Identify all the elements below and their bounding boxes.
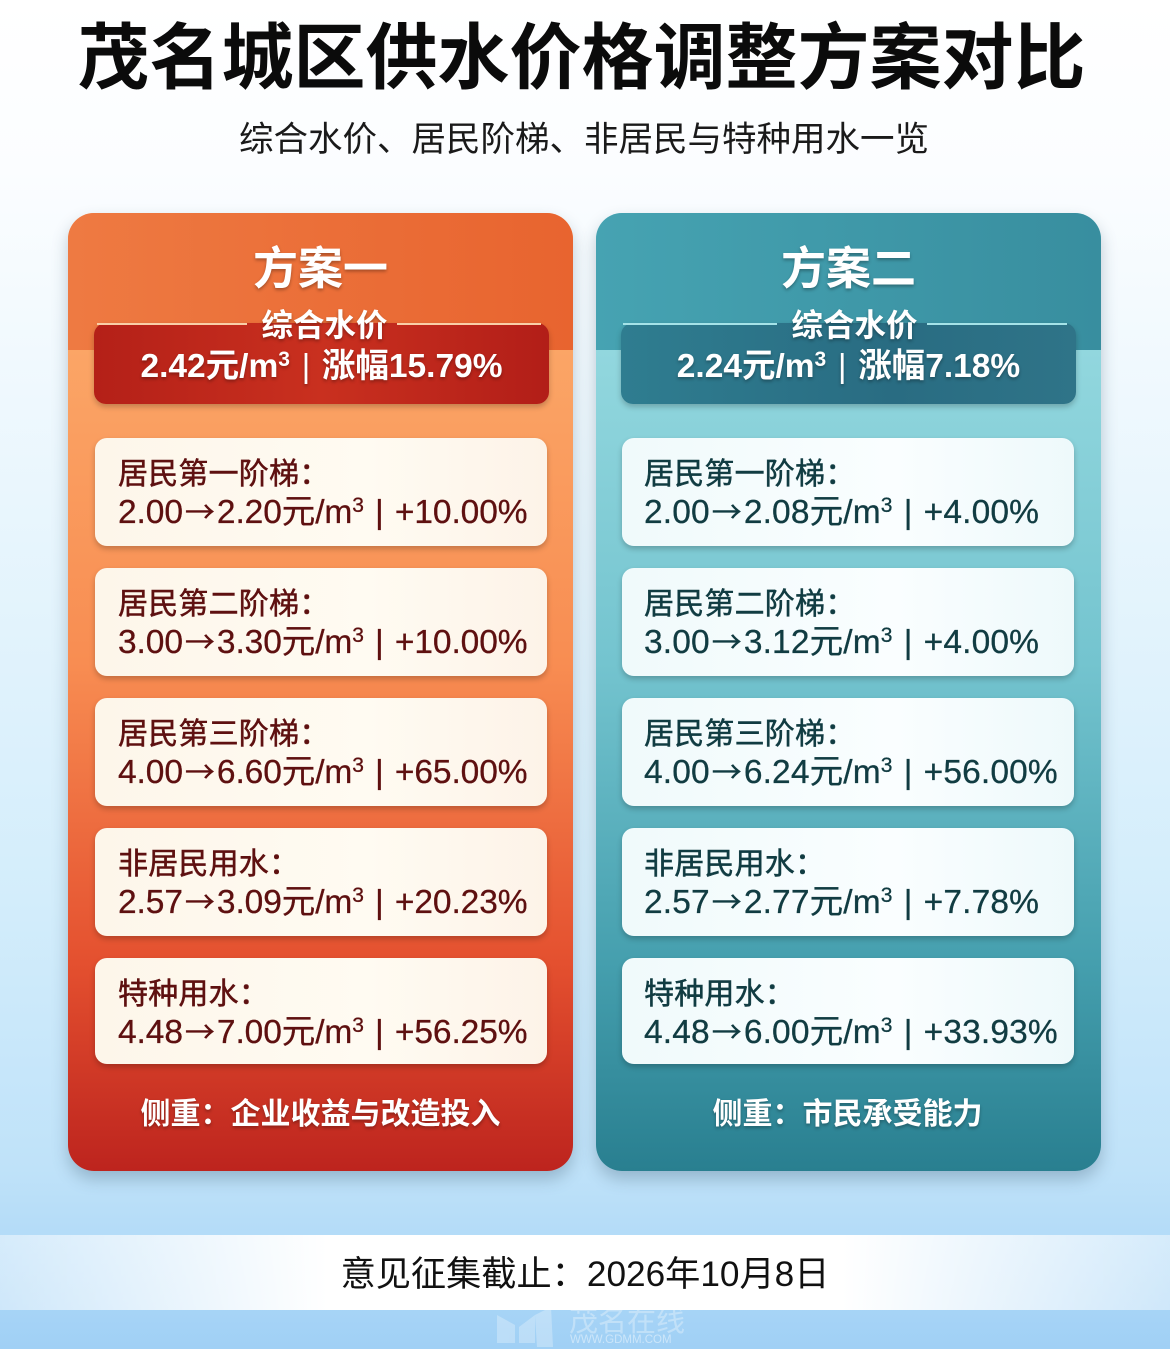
card: tier two: | [904,624,913,661]
card: special water: → [712,1008,742,1052]
card: special water: | [904,1014,913,1051]
panel: plan one [68,213,573,1171]
card: non-resident [622,828,1074,936]
card: tier three: 3 [881,754,893,777]
card: tier three: 居民第三阶梯： [118,709,329,753]
card: tier one [622,438,1074,546]
plan two composite price box [621,323,1076,404]
deadline banner [0,1235,1170,1310]
card: tier three: | [375,754,384,791]
card: tier two [622,568,1074,676]
card: non-resident: 非居民用水： [644,839,825,883]
card: tier three: | [904,754,913,791]
plan two focus: 侧重：市民承受能力 [712,1089,982,1133]
watermark [497,1303,685,1347]
card: special water [95,958,547,1064]
plan one focus: 侧重：企业收益与改造投入 [140,1089,500,1133]
card: tier one: → [712,488,742,532]
card: tier three: 4.00 6.60元/m +65.00% [118,754,527,791]
card: tier one: | [375,494,384,531]
card: tier one: 居民第一阶梯： [644,449,855,493]
card: tier one: | [904,494,913,531]
card: tier two: 居民第二阶梯： [118,579,329,623]
card: non-resident: 2.57 2.77元/m +7.78% [644,884,1039,921]
card: tier two: → [185,618,215,662]
plan one composite price box [94,323,549,404]
card: non-resident [95,828,547,936]
card: non-resident: 2.57 3.09元/m +20.23% [118,884,527,921]
plan two composite label: 综合水价 [791,300,918,346]
card: special water: 3 [352,1014,364,1037]
plan two composite value: 2.24元/m 涨幅7.18% [677,348,1020,385]
subtitle: 综合水价、居民阶梯、非居民与特种用水一览 [239,111,929,161]
card: tier two: 3 [881,624,893,647]
watermark: WWW.GDMM.COM [570,1334,672,1346]
card: tier three [622,698,1074,806]
plan one composite value: 2.42元/m 涨幅15.79% [140,348,503,385]
card: special water: 4.48 7.00元/m +56.25% [118,1014,527,1051]
panel: plan two [596,213,1101,1171]
card: tier one: 2.00 2.20元/m +10.00% [118,494,527,531]
card: special water [622,958,1074,1064]
card: non-resident: | [375,884,384,921]
card: tier three: → [185,748,215,792]
plan two composite value: | [838,348,847,385]
card: non-resident: 3 [352,884,364,907]
card: non-resident: → [712,878,742,922]
plan two heading: 方案二 [781,232,916,297]
card: tier one: 2.00 2.08元/m +4.00% [644,494,1039,531]
card: special water: 3 [881,1014,893,1037]
card: tier two [95,568,547,676]
title: 茂名城区供水价格调整方案对比 [77,0,1086,104]
card: tier two: 居民第二阶梯： [644,579,855,623]
plan two composite value: 3 [815,348,826,371]
card: tier two: 3 [352,624,364,647]
card: tier one: 居民第一阶梯： [118,449,329,493]
card: special water: | [375,1014,384,1051]
card: tier one: 3 [352,494,364,517]
card: tier three [95,698,547,806]
card: tier one: 3 [881,494,893,517]
plan one heading: 方案一 [253,232,388,297]
card: tier three: 3 [352,754,364,777]
card: non-resident: 3 [881,884,893,907]
card: non-resident: 非居民用水： [118,839,299,883]
card: non-resident: | [904,884,913,921]
card: tier two: → [712,618,742,662]
plan one composite value: | [302,348,310,385]
card: special water: 4.48 6.00元/m +33.93% [644,1014,1058,1051]
card: tier three: 4.00 6.24元/m +56.00% [644,754,1058,791]
card: tier one [95,438,547,546]
card: non-resident: → [185,878,215,922]
card: tier two: 3.00 3.30元/m +10.00% [118,624,527,661]
card: special water: 特种用水： [118,969,269,1013]
deadline text: 意见征集截止：2026年10月8日 [341,1255,829,1294]
card: special water: → [185,1008,215,1052]
card: special water: 特种用水： [644,969,795,1013]
card: tier two: 3.00 3.12元/m +4.00% [644,624,1039,661]
card: tier three: 居民第三阶梯： [644,709,855,753]
card: tier three: → [712,748,742,792]
plan one composite label: 综合水价 [261,300,388,346]
card: tier two: | [375,624,384,661]
plan one composite value: 3 [278,348,290,371]
card: tier one: → [185,488,215,532]
